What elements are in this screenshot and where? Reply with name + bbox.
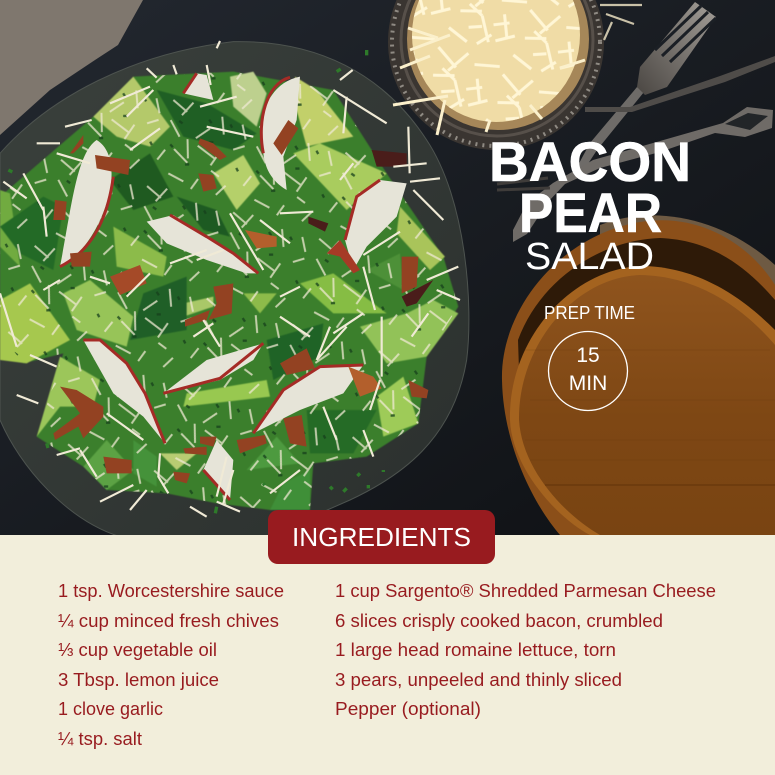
ingredient list: left column: ⅓ cup vegetable oil bbox=[58, 639, 217, 660]
ingredients heading bbox=[268, 510, 495, 564]
title: BACON bbox=[489, 130, 691, 193]
linen napkin bbox=[0, 0, 143, 135]
ingredient list: right column: 6 slices crisply cooked bacon, crumbled bbox=[335, 610, 663, 631]
stacked wooden plates bbox=[502, 215, 775, 535]
ornate spoon bbox=[497, 107, 773, 242]
ingredients section background bbox=[0, 535, 775, 775]
prep time badge bbox=[548, 332, 628, 410]
parmesan shreds over salad and plate bbox=[0, 41, 460, 517]
prep time badge: MIN bbox=[569, 372, 607, 395]
ingredient list: right column: 1 cup Sargento® Shredded Parmesan Cheese bbox=[335, 580, 716, 601]
shredded cheese texture bbox=[0, 72, 458, 510]
glass bowl of parmesan bbox=[388, 0, 604, 150]
title: PEAR bbox=[519, 181, 662, 244]
title bbox=[489, 130, 691, 278]
lettuce leaves bbox=[0, 72, 458, 510]
ingredient list: right column: 1 large head romaine lettuce, torn bbox=[335, 639, 616, 660]
photo: salad table scene bbox=[0, 0, 775, 537]
ingredient list: left column: 1 tsp. Worcestershire sauce bbox=[58, 580, 284, 601]
ingredient list: right column: 3 pears, unpeeled and thinly sliced bbox=[335, 669, 622, 690]
stone plate with salad bbox=[0, 41, 469, 537]
ingredient list: left column: 3 Tbsp. lemon juice bbox=[58, 669, 219, 690]
title: SALAD bbox=[525, 236, 654, 278]
spilled cheese near bowl bbox=[600, 5, 642, 40]
ingredient list: right column bbox=[335, 580, 716, 719]
pear slices bbox=[60, 73, 407, 500]
fork bbox=[577, 2, 716, 170]
ingredient list: left column: ¼ cup minced fresh chives bbox=[58, 610, 279, 631]
pear skin edges bbox=[60, 73, 380, 500]
ingredient list: left column bbox=[58, 580, 284, 749]
chive flecks on plate bbox=[8, 50, 383, 513]
prep time badge: 15 bbox=[576, 344, 600, 367]
ingredient list: right column: Pepper (optional) bbox=[335, 698, 481, 719]
prep time label: PREP TIME bbox=[544, 303, 635, 323]
ingredient list: left column: 1 clove garlic bbox=[58, 698, 163, 719]
ingredients heading: INGREDIENTS bbox=[292, 522, 471, 552]
bacon pieces bbox=[53, 120, 433, 483]
knife bbox=[585, 56, 775, 112]
ingredient list: left column: ¼ tsp. salt bbox=[58, 728, 142, 749]
